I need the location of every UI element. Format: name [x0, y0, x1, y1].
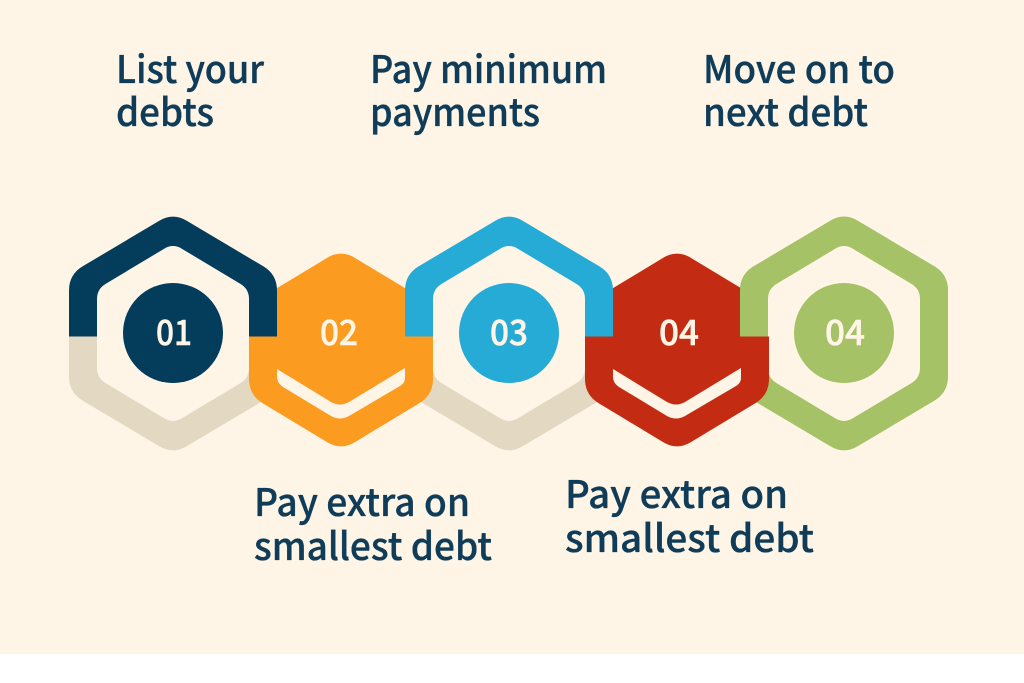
- step label: pay extra on smallest debt, right: smallest debt: [565, 508, 814, 563]
- step label: pay extra on smallest debt, left: smallest debt: [254, 516, 492, 571]
- number 02: 02: [320, 305, 358, 356]
- hexagon 5 green upper ring over red: [740, 216, 948, 336]
- number badge 03: [459, 283, 559, 383]
- number badge 04 green: [794, 283, 894, 383]
- number badge 03: 03: [490, 305, 528, 356]
- hexagon 5 green ring: [740, 217, 948, 450]
- hexagon 3 lower ring: [421, 370, 597, 450]
- hexagon 1 lower ring: [69, 336, 261, 450]
- step label: move on to next debt: [703, 39, 895, 137]
- hexagon 1 navy upper ring: [69, 216, 277, 336]
- hexagon 4 red: [585, 254, 769, 446]
- step label: move on to next debt: Move on to: [703, 39, 895, 94]
- step label: pay extra on smallest debt, right: Pay extra on: [565, 464, 788, 519]
- step label: pay extra on smallest debt, left: Pay extra on: [254, 472, 470, 527]
- number 04 red: 04: [659, 305, 699, 356]
- number badge 01: [123, 283, 223, 383]
- hexagon 2 orange: [249, 254, 433, 446]
- step label: list your debts: [116, 39, 264, 137]
- step label: move on to next debt: next debt: [703, 82, 868, 137]
- hexagon 3 blue upper ring: [405, 216, 613, 336]
- step label: pay extra on smallest debt, left: [254, 472, 492, 571]
- step label: list your debts: List your: [116, 39, 264, 94]
- number badge 01: 01: [156, 305, 192, 356]
- step label: pay minimum payments: [370, 39, 607, 137]
- step label: pay minimum payments: Pay minimum: [370, 39, 607, 94]
- step label: pay minimum payments: payments: [370, 82, 540, 137]
- number badge 04 green: 04: [825, 305, 865, 356]
- step label: list your debts: debts: [116, 82, 214, 137]
- step label: pay extra on smallest debt, right: [565, 464, 814, 563]
